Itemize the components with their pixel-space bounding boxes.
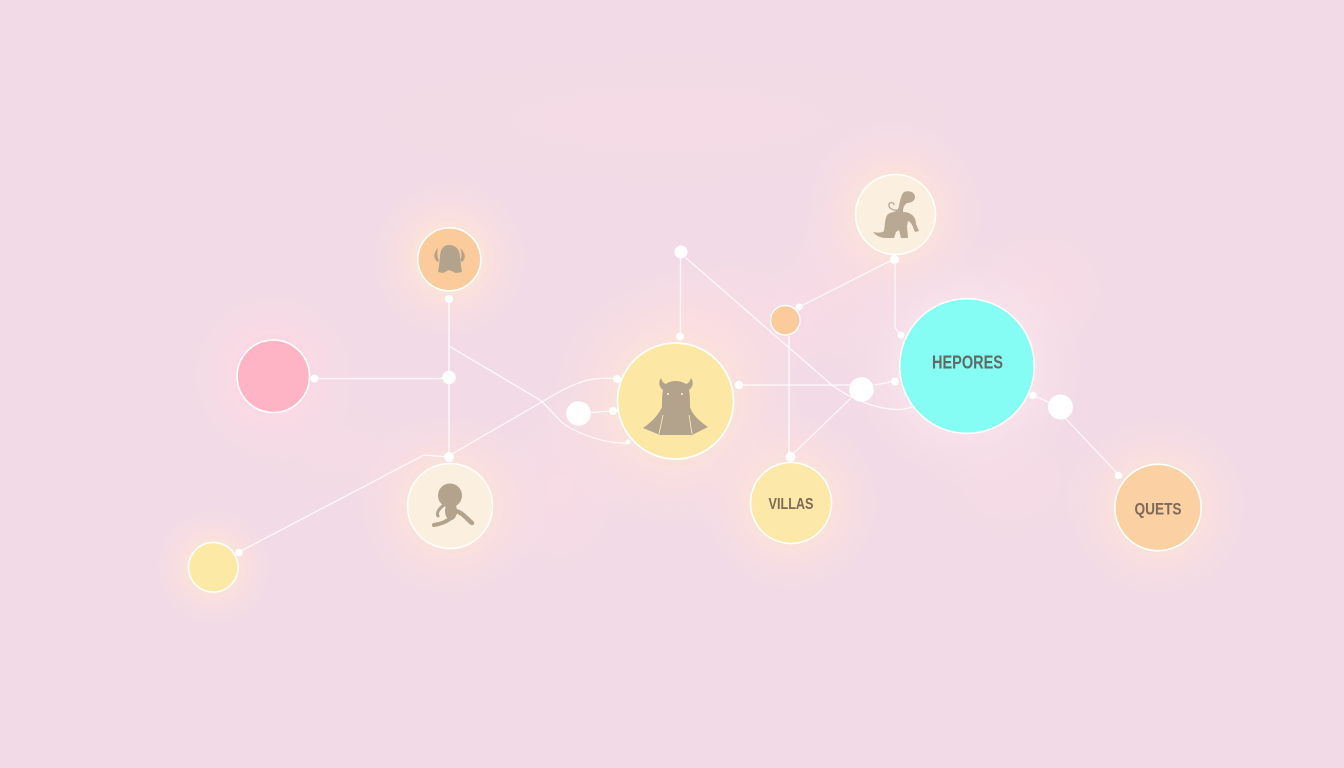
node: small yellow bbox=[188, 542, 238, 592]
label: VILLAS: VILLAS bbox=[768, 496, 814, 513]
icon: crawling figure bbox=[434, 484, 472, 525]
node: orange with horned creature bbox=[418, 228, 481, 291]
node: QUETS bbox=[1115, 464, 1201, 551]
node: HEPORES bbox=[900, 299, 1034, 433]
icon: caped monster bbox=[643, 378, 708, 435]
glows bbox=[151, 119, 1254, 629]
connector dots bbox=[235, 246, 1122, 556]
label: QUETS: QUETS bbox=[1134, 500, 1182, 518]
label: HEPORES: HEPORES bbox=[932, 352, 1003, 372]
node: beige with serpent figure bbox=[856, 174, 936, 254]
background mottling bbox=[230, 30, 1120, 580]
connector lines bbox=[239, 252, 1119, 552]
icon: serpent figure bbox=[873, 191, 919, 238]
node: VILLAS bbox=[750, 462, 832, 544]
node: small orange bbox=[770, 306, 800, 335]
node: beige with crawling figure bbox=[408, 464, 492, 548]
icon: horned creature bbox=[434, 245, 465, 273]
node: main yellow with caped monster bbox=[618, 343, 734, 459]
node: pink bbox=[237, 340, 310, 412]
